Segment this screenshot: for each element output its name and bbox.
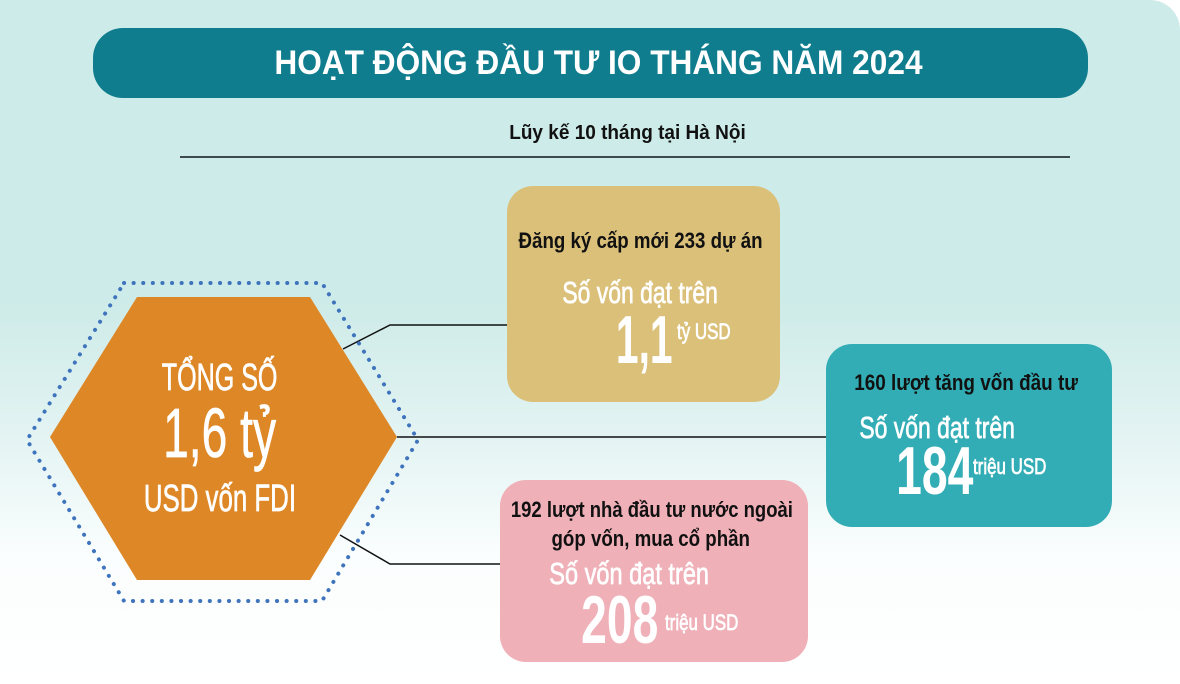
- panel: new projects: [507, 186, 780, 402]
- hexagon: total FDI: USD vốn FDI: [144, 478, 296, 520]
- title: HOẠT ĐỘNG ĐẦU TƯ IO THÁNG NĂM 2024: [274, 44, 922, 82]
- subtitle: Lũy kế 10 tháng tại Hà Nội: [509, 122, 745, 144]
- hexagon: total FDI: 1,6 tỷ: [163, 394, 277, 472]
- panel: capital contribution: 192 lượt nhà đầu tư nước ngoài: [511, 497, 793, 522]
- panel: capital contribution: Số vốn đạt trên: [549, 556, 709, 591]
- panel: new projects: tỷ USD: [677, 319, 731, 344]
- panel: capital increase: 184: [896, 433, 974, 509]
- panel: new projects: Đăng ký cấp mới 233 dự án: [519, 228, 763, 253]
- panel: capital increase: Số vốn đạt trên: [859, 410, 1015, 445]
- panel: capital contribution: góp vốn, mua cổ phần: [552, 526, 750, 551]
- panel: capital increase: triệu USD: [973, 454, 1047, 479]
- hexagon: total FDI: [27, 281, 420, 603]
- hexagon text: TỔNG SỐ: [162, 357, 278, 399]
- panel: capital increase: [826, 344, 1112, 527]
- panel: capital increase: 160 lượt tăng vốn đầu tư: [854, 370, 1078, 395]
- panel: capital contribution: triệu USD: [665, 610, 739, 635]
- panel: new projects: Số vốn đạt trên: [562, 275, 718, 310]
- panel: capital contribution: [500, 480, 808, 662]
- panel: new projects: 1,1: [616, 302, 672, 378]
- title bar: [93, 28, 1088, 98]
- panel: capital contribution: 208: [581, 582, 659, 658]
